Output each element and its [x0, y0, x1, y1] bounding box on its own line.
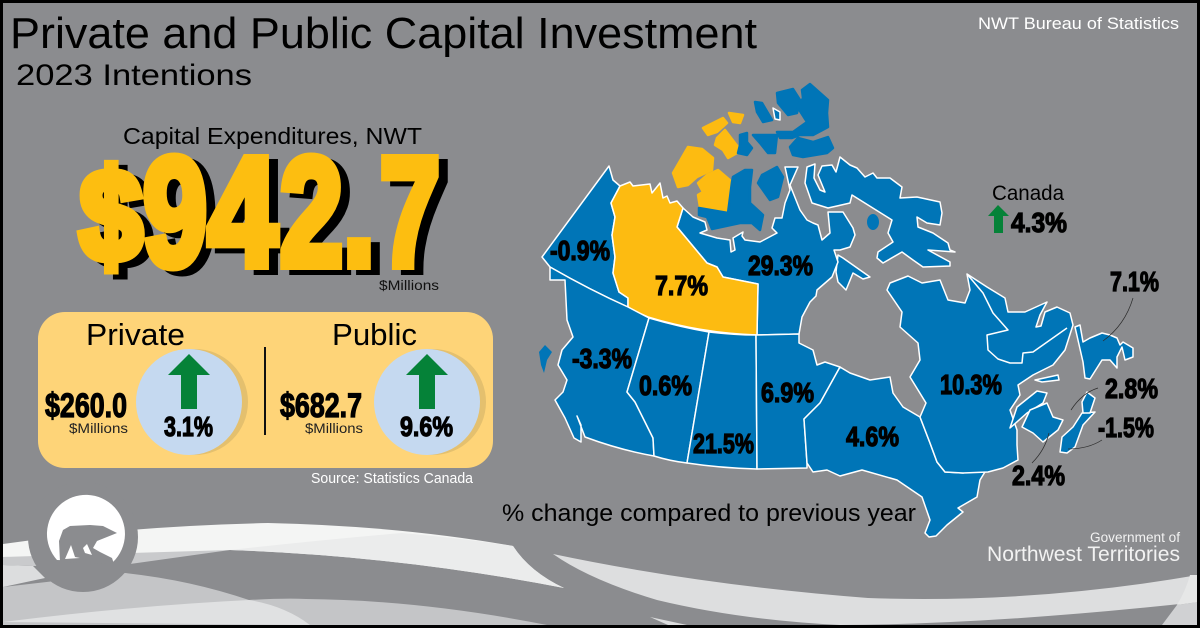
region: New Brunswick — [1022, 403, 1063, 442]
public circle with arrow — [374, 349, 486, 455]
provincial percentage labels: 2.4% — [1012, 460, 1065, 491]
headline value: 7 — [389, 131, 449, 303]
provincial percentage labels: 6.9% — [761, 377, 814, 408]
region: Gaspe — [1010, 391, 1047, 428]
provincial percentage labels: 7.7% — [655, 270, 708, 301]
private heading: Private — [86, 317, 185, 352]
region: Nunavut mainland — [677, 167, 855, 335]
region: Baffin Island, Nunavut — [805, 157, 955, 267]
region: Quebec and Labrador — [887, 274, 1073, 473]
private value: $260.0 — [45, 387, 127, 425]
headline value: 4 — [208, 126, 277, 298]
source organisation: NWT Bureau of Statistics — [978, 14, 1179, 33]
region: Prince Edward Island — [1082, 392, 1095, 413]
headline value: 7 — [380, 126, 440, 298]
subtitle: 2023 Intentions — [16, 59, 252, 92]
headline unit: $Millions — [379, 278, 439, 293]
Arctic islands — [673, 84, 833, 268]
headline value: $ — [89, 150, 151, 293]
region: Ontario — [804, 367, 988, 537]
headline value: 4 — [217, 131, 286, 303]
public circle with arrow: 9.6% — [400, 411, 453, 442]
public unit: $Millions — [305, 420, 363, 436]
headline value: . — [343, 126, 375, 298]
headline value: 2 — [289, 131, 352, 303]
provincial percentage labels: 2.8% — [1105, 373, 1158, 404]
source note: Source: Statistics Canada — [311, 471, 474, 487]
leader lines — [1032, 298, 1133, 463]
region: Saskatchewan — [687, 332, 757, 469]
region: Nova Scotia — [1060, 412, 1095, 453]
panel: private and public — [38, 312, 493, 468]
private circle with arrow: 3.1% — [164, 411, 213, 442]
headline value: $ — [80, 145, 142, 288]
region: Yukon — [542, 166, 628, 307]
private circle with arrow — [136, 349, 248, 455]
Canada summary — [988, 182, 1067, 238]
region: Manitoba — [756, 334, 840, 469]
Canada summary: 4.3% — [1011, 207, 1067, 238]
government wordmark: Government of — [1090, 530, 1180, 545]
provincial percentage labels — [550, 235, 1159, 491]
provincial percentage labels: 0.6% — [639, 370, 692, 401]
provincial percentage labels: -0.9% — [550, 235, 610, 266]
public heading: Public — [332, 317, 417, 352]
region: Northwest Territories — [611, 182, 758, 335]
provincial percentage labels: -3.3% — [572, 343, 632, 374]
divider — [264, 347, 266, 435]
provincial percentage labels: -1.5% — [1098, 412, 1154, 443]
Canada summary: Canada — [992, 182, 1064, 205]
government wordmark — [987, 530, 1180, 566]
title: Private and Public Capital Investment — [10, 9, 757, 58]
region: Anticosti — [1035, 375, 1059, 382]
map caption: % change compared to previous year — [502, 500, 916, 527]
headline value: 2 — [280, 126, 343, 298]
footer swoosh decoration — [3, 523, 1198, 625]
capital expenditures heading: Capital Expenditures, NWT — [123, 123, 422, 149]
GNWT polar bear logo — [28, 482, 138, 592]
region: British Columbia — [550, 267, 654, 456]
map of Canada — [539, 84, 1133, 537]
headline value: 9 — [143, 126, 207, 298]
government wordmark: Northwest Territories — [987, 543, 1180, 566]
provincial percentage labels: 7.1% — [1110, 266, 1159, 297]
provincial percentage labels: 29.3% — [748, 250, 813, 281]
provincial percentage labels: 10.3% — [940, 369, 1002, 400]
provincial percentage labels: 4.6% — [846, 421, 899, 452]
private unit: $Millions — [69, 420, 128, 436]
region: Haida Gwaii — [539, 345, 552, 373]
region: Newfoundland — [1075, 325, 1133, 379]
provincial percentage labels: 21.5% — [693, 428, 754, 459]
public value: $682.7 — [280, 387, 362, 425]
region: Southampton Island, Nunavut — [836, 255, 870, 290]
headline value: . — [352, 131, 384, 303]
region: Alberta — [627, 318, 709, 463]
headline value: 9 — [152, 131, 216, 303]
headline value — [80, 126, 449, 303]
